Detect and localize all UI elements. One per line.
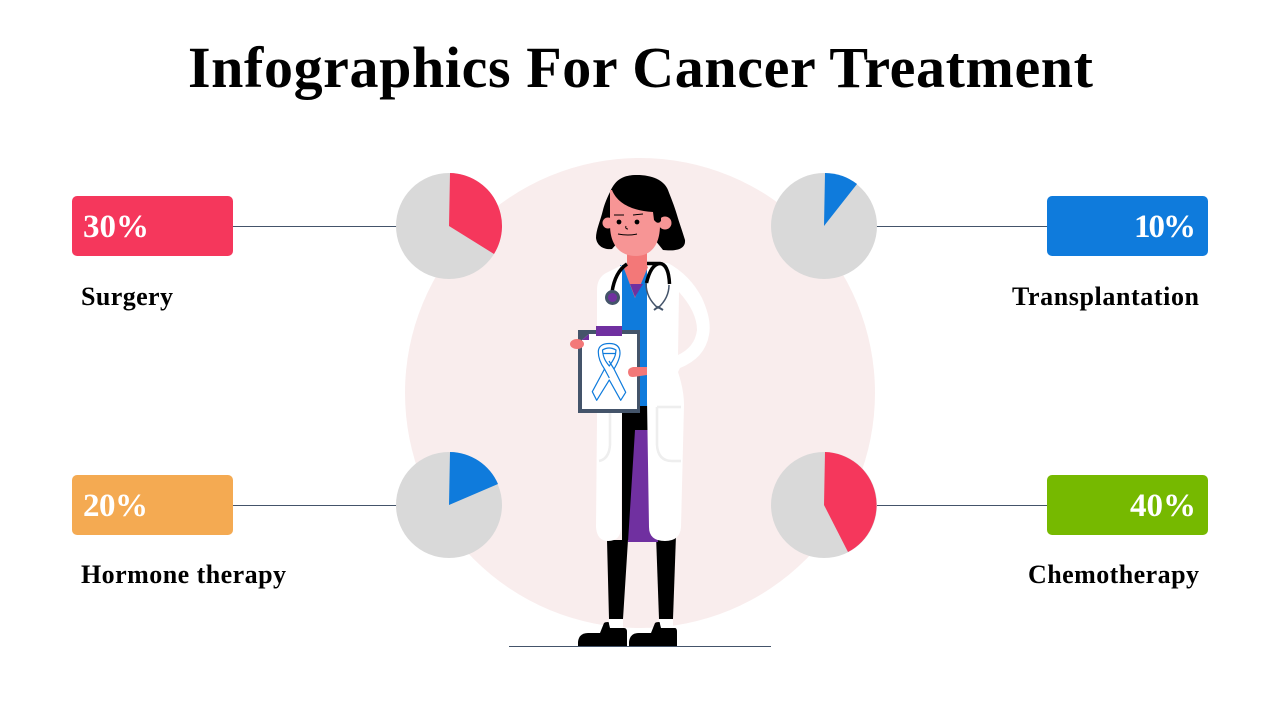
ground line (509, 646, 771, 647)
scrubs (620, 265, 650, 406)
legs and shoes (578, 400, 677, 646)
lab coat (596, 263, 710, 541)
pie chart: transplantation (771, 173, 877, 279)
badge: 40% (1047, 475, 1208, 535)
pie chart: hormone therapy (396, 452, 502, 558)
badge: 30% (72, 196, 233, 256)
hair back (596, 175, 685, 250)
label: chemotherapy: Chemotherapy (1028, 560, 1199, 589)
background circle (405, 158, 875, 628)
face (610, 190, 660, 256)
collar accent (630, 284, 643, 297)
arm gap (678, 292, 697, 355)
clipboard (578, 326, 640, 413)
coat pockets (599, 407, 681, 461)
panel: hormone therapy (72, 452, 502, 589)
label: hormone therapy: Hormone therapy (81, 560, 286, 589)
label: transplantation: Transplantation (1012, 282, 1200, 311)
panel: surgery (72, 173, 502, 311)
value: 10%: 10% (1134, 209, 1196, 245)
left hand (570, 339, 584, 349)
facial features (614, 214, 643, 235)
stethoscope (606, 264, 670, 310)
awareness ribbon icon (592, 344, 626, 400)
value: 20%: 20% (83, 488, 148, 524)
fringe (612, 175, 668, 223)
neck (623, 250, 648, 298)
value: 40%: 40% (1130, 488, 1196, 524)
title: Infographics For Cancer Treatment (188, 35, 1094, 100)
pie chart: surgery (396, 173, 502, 279)
right hand (628, 367, 647, 377)
ears (602, 216, 672, 230)
badge: 10% (1047, 196, 1208, 256)
panel: transplantation (771, 173, 1208, 311)
badge: 20% (72, 475, 233, 535)
illustration: doctor (570, 175, 710, 646)
pie chart: chemotherapy (771, 452, 877, 558)
label: surgery: Surgery (81, 282, 173, 311)
panel: chemotherapy (771, 452, 1208, 589)
value: 30%: 30% (83, 209, 149, 245)
skirt (628, 430, 658, 542)
